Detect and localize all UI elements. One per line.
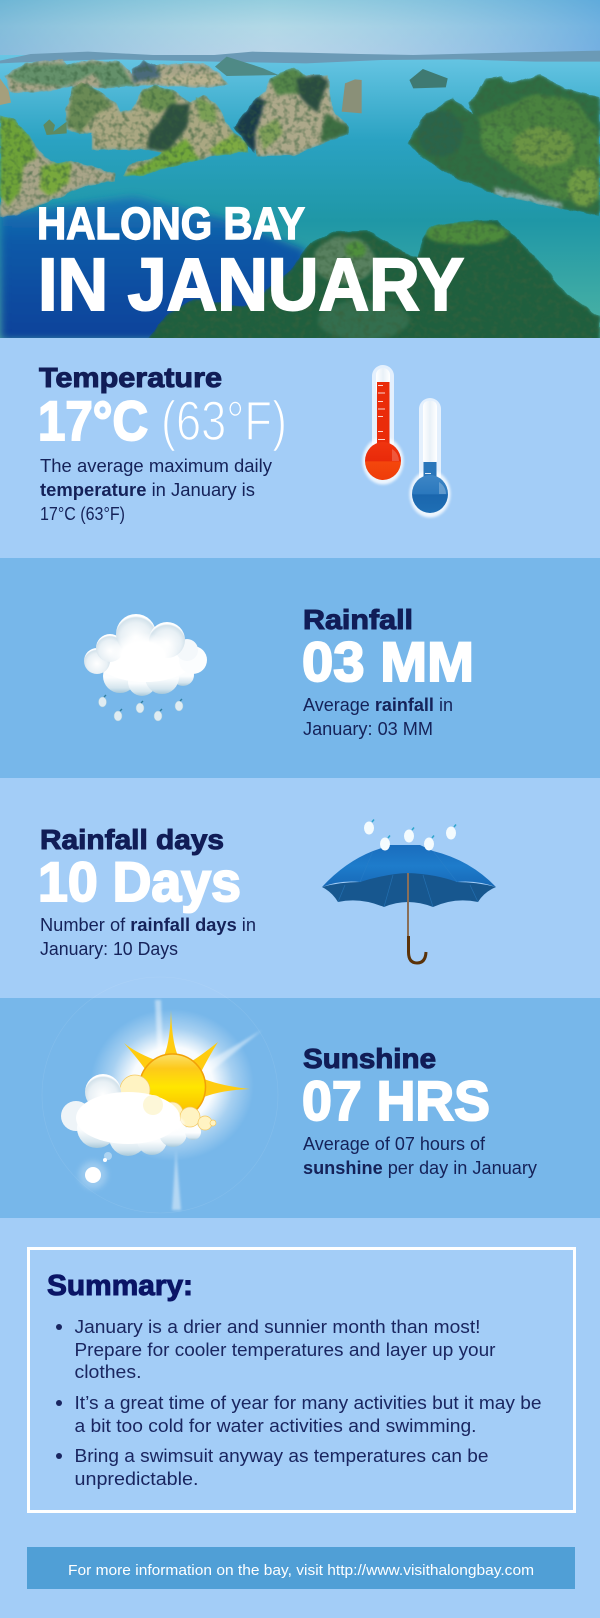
sunshine description: Average of 07 hours of xyxy=(303,1134,486,1154)
tower islet xyxy=(342,79,362,113)
karst islands, left half xyxy=(0,57,362,217)
rainfall days description: January: 10 Days xyxy=(40,939,178,959)
summary bullet list: Bring a swimsuit anyway as temperatures can be xyxy=(74,1446,488,1466)
temperature value: 17°C xyxy=(38,389,148,452)
temperature description: temperature in January is xyxy=(40,480,255,500)
panel: summary section xyxy=(0,1218,600,1618)
lens flare dots xyxy=(79,1152,112,1189)
rainfall days heading: Rainfall days xyxy=(40,824,224,855)
hero photo: Halong Bay xyxy=(0,0,600,347)
temperature description: 17°C (63°F) xyxy=(40,504,125,524)
island group left-centre xyxy=(66,82,248,176)
sunshine value: 07 HRS xyxy=(302,1069,490,1132)
temperature value xyxy=(38,389,287,452)
sun rays xyxy=(124,1010,250,1097)
summary bullet list: a bit too cold for water activities and swimming. xyxy=(74,1416,476,1436)
back-centre islands xyxy=(215,57,278,76)
temperature heading: Temperature xyxy=(39,362,222,393)
sun disc xyxy=(140,1054,206,1120)
summary bullet list: Prepare for cooler temperatures and layer up your xyxy=(74,1340,496,1360)
left foreground island xyxy=(0,115,115,217)
summary bullet list: January is a drier and sunnier month than most! xyxy=(74,1317,480,1337)
back-left island xyxy=(5,60,228,93)
water xyxy=(0,55,600,342)
sky xyxy=(0,0,600,58)
sunshine description xyxy=(303,1134,537,1178)
panel: rainfall xyxy=(0,558,600,778)
rainfall description: January: 03 MM xyxy=(303,719,433,739)
title: IN JANUARY xyxy=(38,243,464,326)
far-left islet xyxy=(0,78,11,105)
bottom foreground island xyxy=(145,220,600,347)
rainfall days value: 10 Days xyxy=(38,850,241,913)
panel: rainfall days xyxy=(0,778,600,998)
icon: cold thermometer xyxy=(410,398,450,518)
rainfall heading: Rainfall xyxy=(303,604,413,635)
icon: umbrella xyxy=(322,820,496,963)
summary bullet list: unpredictable. xyxy=(74,1469,198,1489)
rain drops xyxy=(98,695,183,721)
rainfall description xyxy=(303,695,453,739)
sunshine description: sunshine per day in January xyxy=(303,1158,537,1178)
temperature value: (63°F) xyxy=(161,389,287,452)
distant karst range xyxy=(0,51,600,63)
title xyxy=(39,206,464,312)
summary heading: Summary: xyxy=(47,1270,193,1302)
icon: rain cloud xyxy=(84,614,207,721)
temperature description: The average maximum daily xyxy=(40,456,272,476)
panel: sunshine xyxy=(0,977,600,1218)
rainfall days description xyxy=(40,915,256,959)
rainfall value: 03 MM xyxy=(302,630,474,693)
footer link bar: For more information on the bay, visit http://www.visithalongbay.com xyxy=(68,1562,534,1579)
title: HALONG BAY xyxy=(37,198,305,249)
rainfall days description: Number of rainfall days in xyxy=(40,915,256,935)
right big island xyxy=(408,75,600,217)
sunshine heading: Sunshine xyxy=(303,1043,436,1074)
temperature description xyxy=(40,456,272,524)
summary box xyxy=(28,1248,574,1512)
rainfall description: Average rainfall in xyxy=(303,695,453,715)
icon: sun behind cloud xyxy=(42,977,278,1213)
footer link bar xyxy=(27,1547,575,1589)
small islets xyxy=(43,119,67,135)
central island xyxy=(233,67,348,157)
summary bullet list: It’s a great time of year for many activities but it may be xyxy=(74,1393,542,1413)
cloud xyxy=(61,1074,216,1156)
panel: temperature xyxy=(0,338,600,558)
summary bullet list: clothes. xyxy=(74,1362,142,1382)
water drops xyxy=(364,820,456,850)
icon: hot thermometer xyxy=(362,365,404,484)
small far islet xyxy=(409,69,448,88)
summary bullet list xyxy=(56,1317,542,1489)
